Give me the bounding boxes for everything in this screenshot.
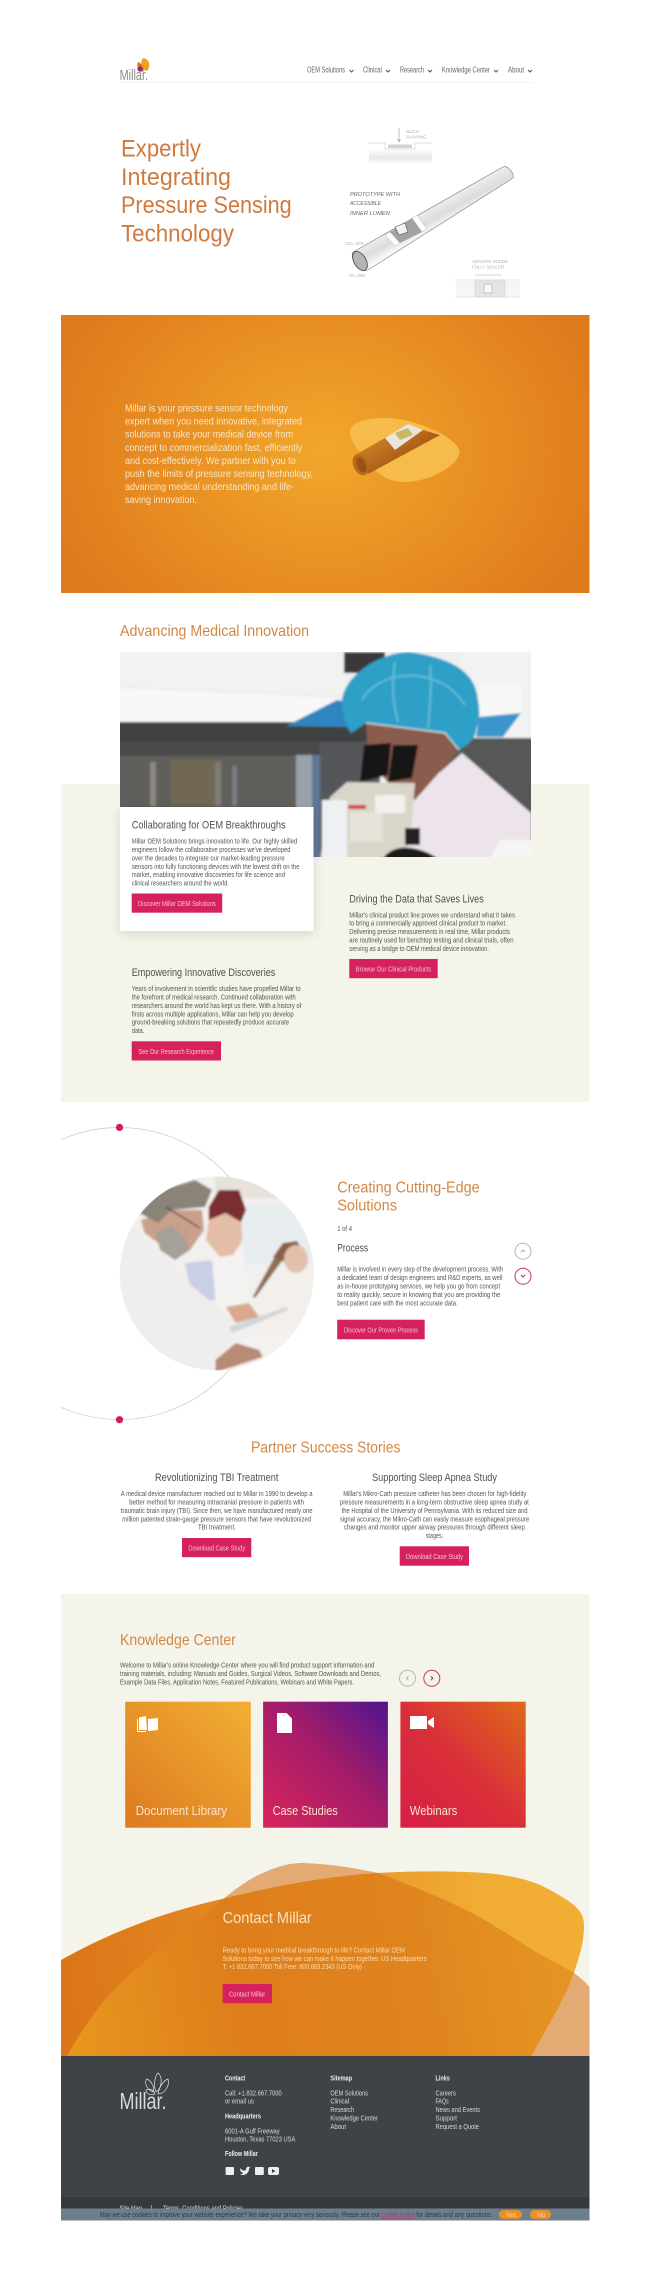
block: empowering innovative discoveries: See Our Research Experience — [138, 1049, 214, 1056]
block: empowering innovative discoveries: ground-breaking solutions that repeatedly produce accurate — [132, 1020, 289, 1027]
panel: creating cutting-edge solutions: 1 of 4 — [337, 1226, 352, 1233]
footer column: contact: Call: +1.832.667.7000 — [225, 2088, 282, 2097]
story: supporting sleep apnea study: Download Case Study — [406, 1554, 463, 1561]
card body text: clinical researchers around the world. — [132, 881, 229, 888]
block: empowering innovative discoveries: data. — [132, 1028, 144, 1035]
block: driving the data: serving as a bridge to OEM medical device innovation. — [349, 946, 489, 953]
card body text: Millar OEM Solutions brings innovation to life. Our highly skilled — [132, 838, 297, 846]
story: supporting sleep apnea study: changes and monitor upper airway pressures through different sleep — [344, 1525, 525, 1532]
story: revolutionizing TBI treatment — [121, 1472, 313, 1557]
hero text: Millar is your pressure sensor technology — [125, 404, 289, 414]
process text: as in-house prototyping services, we help you go from concept — [337, 1284, 500, 1290]
title: Technology — [121, 221, 234, 248]
sketch: catheter prototype — [345, 128, 520, 297]
title: Integrating — [121, 164, 231, 191]
button — [132, 894, 222, 913]
knowledge center intro: Welcome to Millar's online Knowledge Center where you will find product support information and — [120, 1663, 374, 1670]
story: supporting sleep apnea study: Supporting Sleep Apnea Study — [372, 1472, 497, 1484]
story: supporting sleep apnea study: stages. — [426, 1533, 443, 1540]
block: driving the data: Driving the Data that Saves Lives — [349, 893, 484, 905]
social icons — [226, 2167, 279, 2175]
footer column: links — [436, 2074, 480, 2131]
hero text: saving innovation. — [125, 495, 197, 506]
knowledge center intro: Example Data Files, Application Notes, Featured Publications, Webinars and White Papers. — [120, 1680, 354, 1686]
sketch: tube — [350, 167, 513, 273]
block: empowering innovative discoveries: the forefront of medical research. Continued collaboration with — [132, 994, 296, 1002]
story: supporting sleep apnea study — [340, 1472, 529, 1566]
story: supporting sleep apnea study: the Hospital of the University of Pennsylvania. With its reduced size and — [342, 1508, 528, 1515]
cookie bar: cookie policy — [382, 2210, 415, 2219]
panel: orange hero — [61, 315, 590, 593]
story: revolutionizing TBI treatment: better method for measuring intracranial pressure in patients with — [129, 1500, 304, 1506]
panel: creating cutting-edge solutions: Process — [337, 1243, 369, 1255]
heading: advancing medical innovation: Advancing Medical Innovation — [120, 623, 309, 640]
button: Discover Millar OEM Solutions — [138, 901, 216, 908]
story: supporting sleep apnea study: signal accuracy, the Mikro-Cath can easily measure esophageal pressure — [340, 1516, 529, 1523]
icon: book — [137, 1716, 158, 1732]
hero text: concept to commercialization fast, efficiently — [125, 443, 303, 454]
sketch: annotations: PROTOTYPE WITH — [350, 192, 400, 198]
process text: to reality quickly, secure in knowing that you are providing the — [337, 1292, 500, 1299]
hero text: advancing medical understanding and life- — [125, 482, 294, 493]
card: case studies: Case Studies — [273, 1803, 338, 1818]
block: driving the data: Browse Our Clinical Products — [356, 966, 432, 974]
title — [121, 136, 292, 248]
knowledge center intro: training materials, including: Manuals and Guides, Surgical Videos, Software Downloads and Demos, — [120, 1671, 381, 1678]
footer column: contact: Houston, Texas 77023 USA — [225, 2135, 295, 2144]
blob overlap — [67, 1863, 593, 2056]
card body text: over the decades to integrate our market-leading pressure — [132, 855, 285, 862]
button: yes: Yes — [506, 2212, 517, 2219]
cookie bar — [61, 2208, 590, 2220]
hero text — [125, 404, 313, 506]
icon: previous arrow — [400, 1670, 416, 1686]
navigation: About — [508, 66, 525, 74]
sketch: bottom detail — [455, 259, 520, 297]
footer column: links: Links — [436, 2074, 450, 2083]
footer column: links: FAQs — [436, 2097, 449, 2106]
hero text: expert when you need innovative, integrated — [125, 416, 302, 428]
panel: creating cutting-edge solutions: Solutions — [337, 1198, 397, 1215]
button: Discover Our Proven Process — [344, 1328, 418, 1334]
hero text: push the limits of pressure sensing technology, — [125, 469, 313, 480]
title: Pressure Sensing — [121, 192, 292, 219]
navigation — [307, 66, 532, 74]
sketch: annotations: ID=.056 — [349, 273, 365, 278]
footer column: contact: or email us — [225, 2097, 254, 2106]
footer column: sitemap: Sitemap — [330, 2074, 352, 2083]
card: collaborating for OEM breakthroughs: Collaborating for OEM Breakthroughs — [132, 820, 286, 832]
story: revolutionizing TBI treatment: Revolutionizing TBI Treatment — [155, 1472, 278, 1484]
contact text: Contact Millar — [223, 1910, 312, 1927]
cookie bar: May we use cookies to improve your website experience? We take your privacy very seriously. Please see our — [100, 2210, 380, 2219]
footer legal links: | — [150, 2204, 152, 2212]
block: driving the data: Delivering precise measurements in real time, Millar products — [349, 929, 510, 936]
navigation: Clinical — [363, 66, 382, 74]
block: empowering innovative discoveries: Years of involvement in scientific studies have propelled Millar to — [132, 986, 301, 993]
logo: Millar. — [120, 67, 148, 84]
cookie bar: for details and any questions. — [416, 2210, 493, 2219]
panel: knowledge center: Knowledge Center — [120, 1632, 236, 1649]
footer column: contact — [225, 2074, 295, 2175]
button: no: No — [537, 2212, 546, 2219]
navigation: OEM Solutions — [307, 66, 345, 74]
icon: up arrow — [515, 1243, 531, 1259]
photo: technician at microscope — [118, 650, 534, 862]
footer column: links: Request a Quote — [436, 2122, 479, 2131]
panel: creating cutting-edge solutions: Creating Cutting-Edge — [337, 1180, 480, 1197]
block: empowering innovative discoveries: firsts across multiple applications, Millar can help you develop — [132, 1011, 294, 1018]
hero text: and cost-effectively. We partner with you to — [125, 456, 296, 467]
icon: video camera — [410, 1716, 434, 1729]
header — [120, 58, 532, 84]
card: case studies — [263, 1702, 388, 1828]
photo: doctors reviewing chart — [118, 1174, 316, 1374]
footer legal links — [120, 2204, 243, 2212]
story: revolutionizing TBI treatment: A medical device manufacturer reached out to Millar in 1990 to develop a — [121, 1491, 313, 1498]
footer column: sitemap: Clinical — [330, 2097, 349, 2106]
navigation: Knowledge Center — [442, 66, 490, 74]
card body text: engineers follow the collaborative processes we've developed — [132, 847, 291, 854]
tan blob — [223, 1863, 590, 2056]
contact text: Ready to bring your medical breakthrough to life? Contact Millar OEM — [223, 1947, 405, 1954]
story: revolutionizing TBI treatment: TBI treatment. — [198, 1525, 236, 1532]
orbit arc with dots — [61, 1124, 230, 1424]
contact text: T: +1 832.667.7000 Toll Free: 800.669.2343 (US Only) — [223, 1964, 362, 1971]
footer column: links: Careers — [436, 2088, 456, 2097]
footer logo: Millar. — [120, 2088, 166, 2114]
process text: a dedicated team of design engineers and R&D experts, as well — [337, 1275, 503, 1282]
footer column: contact: 6001-A Gulf Freeway — [225, 2126, 280, 2135]
sketch: annotations: INNER LUMEN — [350, 211, 390, 217]
button — [223, 1984, 272, 2003]
icon: down arrow — [515, 1268, 531, 1284]
footer legal links: Site Map — [120, 2204, 142, 2212]
sketch: top detail: DUCH — [406, 129, 420, 134]
logo — [120, 58, 149, 84]
sketch: top detail: SHARING — [406, 134, 427, 140]
panel: creating cutting-edge solutions — [337, 1180, 531, 1339]
story: revolutionizing TBI treatment: traumatic brain injury (TBI). Since then, we have manufactured nearly one — [121, 1508, 313, 1515]
block: driving the data: Millar's clinical product line proves we understand what it takes — [349, 912, 515, 919]
block: driving the data: are routinely used for benchtop testing and clinical trials, often — [349, 938, 514, 945]
panel: knowledge center — [61, 1594, 590, 2056]
card: collaborating for OEM breakthroughs — [120, 807, 314, 931]
contact text — [223, 1910, 427, 2003]
footer column: sitemap: About — [330, 2122, 346, 2131]
footer — [61, 2056, 590, 2212]
process text — [337, 1267, 503, 1307]
sketch: bottom detail: SENSOR INSIDE — [472, 259, 509, 264]
panel: cream innovation background — [61, 784, 590, 1102]
card: webinars: Webinars — [410, 1803, 458, 1818]
card body text — [132, 838, 300, 888]
contact text: Solutions today to see how we can make it happen together. US Headquarters — [223, 1956, 427, 1963]
footer column: contact: Headquarters — [225, 2112, 261, 2121]
sketch: top detail — [368, 128, 432, 163]
block: driving the data: to bring a commercially approved clinical product to market. — [349, 921, 507, 928]
block: empowering innovative discoveries: researchers around the world has kept us there. With a history of — [132, 1003, 301, 1010]
card body text: market, enabling innovative discoveries for life science and — [132, 872, 285, 879]
footer column: sitemap: Knowledge Center — [330, 2114, 378, 2123]
story: revolutionizing TBI treatment: Download Case Study — [188, 1546, 246, 1552]
button: yes — [499, 2210, 522, 2219]
hero text: solutions to take your medical device from — [125, 430, 293, 441]
block: empowering innovative discoveries — [132, 967, 301, 1060]
icon: document — [277, 1713, 292, 1733]
footer column: contact: Follow Millar — [225, 2149, 258, 2158]
footer legal links: Terms, Conditions and Policies — [163, 2204, 243, 2212]
footer column: links: News and Events — [436, 2105, 480, 2114]
sketch: annotations: ACCESSIBLE — [349, 201, 381, 207]
process text: Millar is involved in every step of the development process. With — [337, 1267, 503, 1274]
button: Contact Millar — [229, 1992, 266, 1998]
footer column: sitemap: Research — [330, 2105, 354, 2114]
block: driving the data — [349, 893, 515, 978]
card: webinars — [400, 1702, 526, 1828]
sketch: annotations — [345, 192, 400, 278]
sketch: annotations: OD=.079 — [345, 241, 364, 246]
footer column: sitemap: OEM Solutions — [330, 2088, 368, 2097]
button — [337, 1320, 425, 1339]
knowledge center intro — [120, 1663, 381, 1686]
yellow blob — [61, 1871, 584, 2056]
sketch: bottom detail: FULLY SEALED — [472, 264, 505, 270]
footer logo — [120, 2073, 168, 2114]
navigation: Research — [400, 66, 424, 74]
story: supporting sleep apnea study: Millar's Mikro-Cath pressure catheter has been chosen for high-fidelity — [343, 1491, 527, 1498]
story: revolutionizing TBI treatment: million patented strain-gauge pressure sensors that have revolutionized — [122, 1516, 311, 1523]
footer column: links: Support — [436, 2114, 457, 2123]
card: document library: Document Library — [136, 1803, 227, 1818]
story: supporting sleep apnea study: pressure measurements in a long-term obstructive sleep apnea study at — [340, 1500, 529, 1506]
block: empowering innovative discoveries: Empowering Innovative Discoveries — [132, 967, 276, 979]
card: document library — [125, 1702, 251, 1828]
process text: best patient care with the most accurate data. — [337, 1300, 458, 1307]
footer column: sitemap — [330, 2074, 378, 2131]
card body text: sensors into fully functioning devices with the lowest drift on the — [132, 864, 300, 871]
button: no — [530, 2210, 551, 2219]
icon: sensor on catheter — [350, 418, 460, 482]
contact blobs — [61, 1863, 593, 2056]
heading: partner success stories: Partner Success Stories — [251, 1440, 400, 1457]
title: Expertly — [121, 136, 201, 163]
icon: next arrow — [424, 1670, 440, 1686]
footer column: contact: Contact — [225, 2074, 246, 2083]
